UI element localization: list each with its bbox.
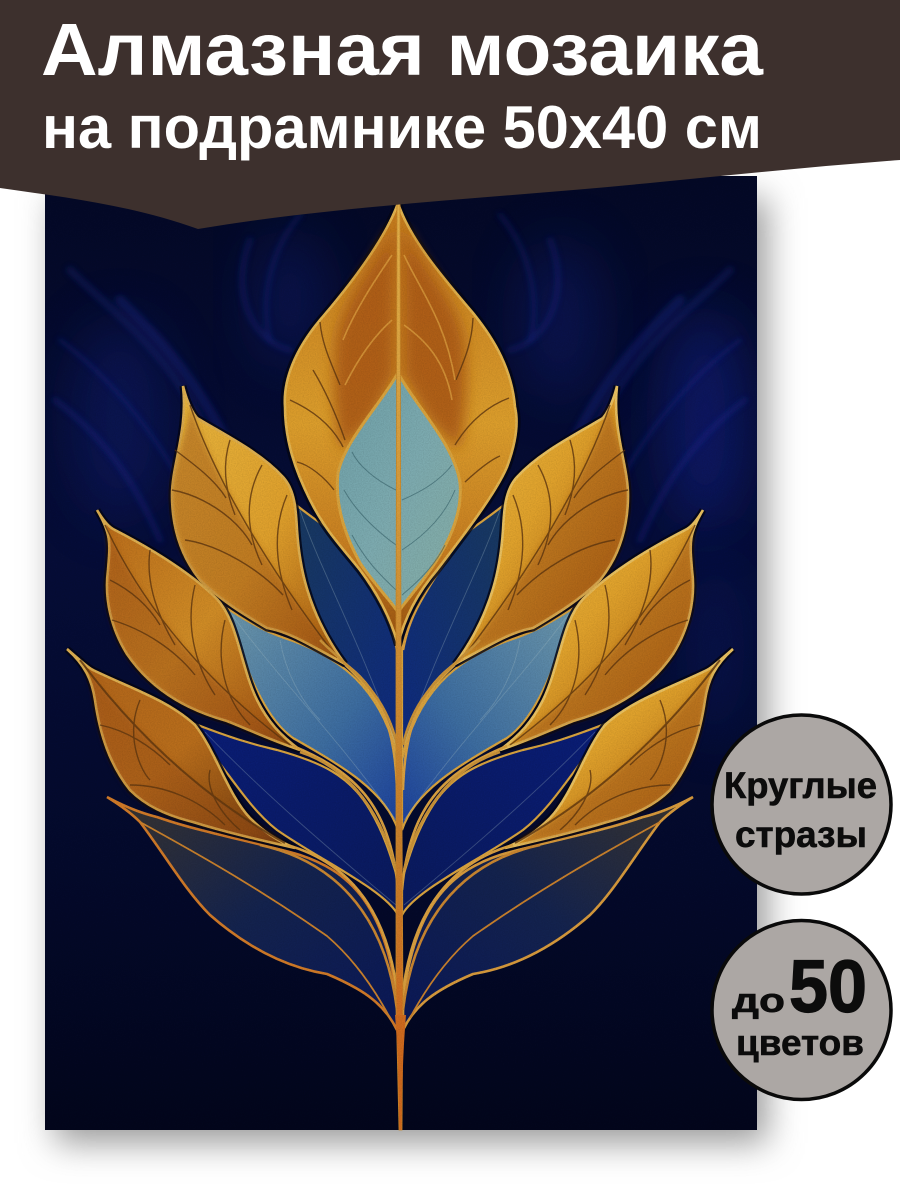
- top leaf outline shadow: [285, 203, 516, 645]
- badge: round rhinestones: [712, 715, 891, 894]
- golden strands: [260, 555, 540, 1010]
- leaf veins: [80, 405, 720, 843]
- central stem: [395, 203, 406, 1130]
- background feather glows: [70, 230, 745, 740]
- leaf darker halves: [80, 405, 720, 843]
- badge text line 2: стразы: [735, 814, 867, 855]
- bottom dark leaves: [107, 797, 693, 1030]
- title line 1: Алмазная мозаика: [41, 8, 764, 91]
- badge: up to 50 colors: [712, 920, 891, 1100]
- golden leaf plant: [67, 203, 733, 1130]
- top leaf veins: [290, 318, 509, 490]
- painting grain: [45, 176, 757, 1130]
- painting background: [45, 176, 757, 1130]
- panel: painting: [45, 176, 757, 1130]
- top leaf light veins: [343, 255, 455, 400]
- blue leaf veins: [140, 510, 660, 1018]
- right blue leaves: [402, 500, 615, 915]
- badge number: 50: 50: [789, 945, 867, 1028]
- title: [41, 8, 764, 161]
- title line 2: на подрамнике 50х40 см: [42, 94, 762, 161]
- banner: [0, 0, 900, 229]
- left golden leaves: [67, 386, 345, 848]
- badge text line 1: Круглые: [724, 765, 877, 806]
- left blue leaves: [185, 500, 398, 915]
- top leaf dark centres: [334, 225, 466, 450]
- top leaf: [285, 203, 516, 645]
- teal leaf veins: [344, 452, 455, 595]
- background feathers: [55, 215, 745, 540]
- badge word: colors: цветов: [736, 1022, 864, 1063]
- right golden leaves: [455, 386, 733, 848]
- canvas shadow: [55, 198, 767, 1143]
- badge word: up to: до: [732, 982, 785, 1020]
- leaf dark outlines: [67, 386, 733, 848]
- stem base flare: [395, 1015, 406, 1130]
- teal inner leaf: [337, 373, 460, 612]
